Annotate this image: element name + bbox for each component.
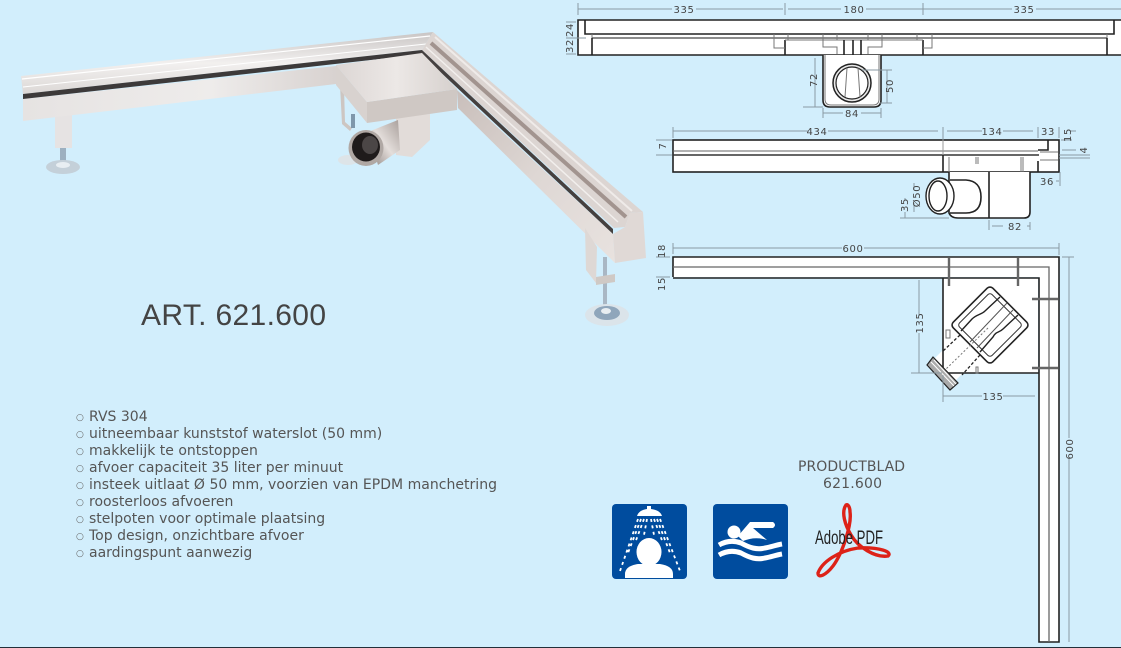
- icon: shower: [612, 504, 687, 579]
- left support foot: [46, 110, 80, 174]
- dimensions: 36: [1040, 177, 1054, 188]
- dimensions: 82: [1008, 222, 1022, 233]
- sump box front and side: [336, 65, 367, 123]
- dimensions: 135: [915, 313, 926, 333]
- right support foot: [585, 228, 629, 326]
- outlet pipe: [348, 120, 400, 166]
- outlet circle: [833, 64, 871, 102]
- dimensions: 33: [1041, 127, 1055, 138]
- feature list: RVS 304: [89, 409, 148, 425]
- feature list: Top design, onzichtbare afvoer: [88, 528, 304, 544]
- sump lid: [336, 53, 457, 102]
- dimensions: 24: [565, 23, 576, 37]
- dimensions: 84: [845, 109, 859, 120]
- feature list: insteek uitlaat Ø 50 mm, voorzien van EPDM manchetring: [89, 477, 497, 493]
- feature list: ○: [76, 498, 84, 508]
- product sheet caption: [798, 459, 905, 492]
- feature list: stelpoten voor optimale plaatsing: [89, 511, 325, 527]
- channel end face: [613, 212, 646, 263]
- sump side: [949, 172, 1030, 218]
- dimensions: 180: [844, 5, 864, 16]
- icon: Adobe PDF logo: Adobe PDF: [815, 528, 883, 549]
- feature list: ○: [76, 532, 84, 542]
- right channel top: [422, 32, 643, 228]
- waterslot plan: [950, 285, 1030, 365]
- product sheet caption: PRODUCTBLAD: [798, 459, 905, 475]
- feature list: [76, 409, 497, 561]
- left channel top: [21, 32, 433, 94]
- dimensions: 32: [565, 39, 576, 53]
- feature list: ○: [76, 481, 84, 491]
- dimensions: 600: [1065, 439, 1076, 459]
- dimensions: 135: [983, 392, 1003, 403]
- feature list: ○: [76, 515, 84, 525]
- drain body: [396, 114, 430, 157]
- dimensions: 4: [1079, 147, 1090, 153]
- feature list: ○: [76, 464, 84, 474]
- outlet plan: [927, 328, 988, 390]
- technical drawing: side view: [656, 127, 1090, 233]
- sump outline: [823, 55, 881, 107]
- dimensions: 600: [843, 244, 863, 255]
- feature list: ○: [76, 413, 84, 423]
- right channel front: [457, 90, 615, 263]
- icon: swimmer: [713, 504, 788, 579]
- product sheet caption: 621.600: [823, 476, 882, 492]
- left channel front: [23, 66, 336, 121]
- dimensions: 35: [900, 198, 911, 212]
- dimensions: 72: [809, 73, 820, 87]
- dimensions: 15: [1063, 128, 1074, 142]
- left channel slot: [23, 50, 424, 99]
- mounting studs: [949, 258, 1058, 368]
- icon: Adobe PDF logo: [815, 505, 889, 576]
- feature list: ○: [76, 430, 84, 440]
- dimensions: 50: [885, 79, 896, 93]
- feature list: makkelijk te ontstoppen: [89, 443, 258, 459]
- feature list: ○: [76, 447, 84, 457]
- technical drawing: front view: [565, 3, 1121, 120]
- dimensions: 134: [982, 127, 1002, 138]
- dimensions: Ø50: [911, 185, 923, 207]
- rear foot by sump: [338, 85, 358, 165]
- feature list: afvoer capaciteit 35 liter per minuut: [89, 460, 344, 476]
- dimensions: 335: [1014, 5, 1034, 16]
- feature list: roosterloos afvoeren: [89, 494, 233, 510]
- feature list: aardingspunt aanwezig: [89, 545, 252, 561]
- feature list: ○: [76, 549, 84, 559]
- feature list: uitneembaar kunststof waterslot (50 mm): [89, 426, 382, 442]
- right channel slot: [420, 50, 613, 234]
- dimensions: 335: [674, 5, 694, 16]
- article number heading: ART. 621.600: [141, 299, 326, 332]
- outlet side: [950, 180, 981, 213]
- dimensions: 434: [807, 127, 827, 138]
- product photo: corner shower drain: [21, 32, 646, 326]
- technical drawing: top view: [656, 243, 1076, 642]
- dimensions: [565, 3, 1121, 120]
- dimensions: 7: [658, 143, 669, 149]
- dimensions: [656, 127, 1090, 233]
- dimensions: [656, 243, 1076, 642]
- dimensions: 15: [657, 277, 668, 291]
- dimensions: 18: [657, 244, 668, 258]
